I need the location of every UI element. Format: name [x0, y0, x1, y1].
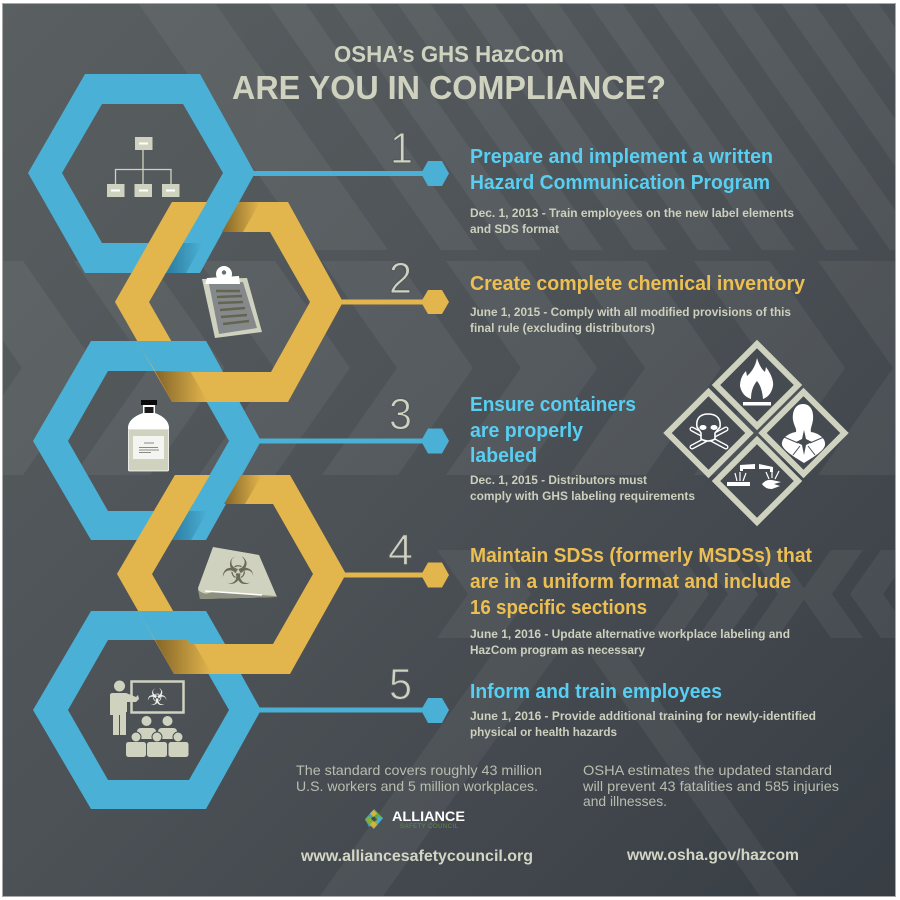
pictogram: corrosion: [716, 440, 798, 522]
step 1 text: [470, 146, 794, 236]
statistic: workers covered: The standard covers roughly 43 million: [296, 762, 542, 778]
icon: biohazard binder: [198, 547, 277, 599]
pictogram: flame: [716, 344, 798, 426]
title: ARE YOU IN COMPLIANCE?: [232, 69, 666, 106]
statistic: fatalities prevented: [582, 762, 839, 809]
step 4 text: HazCom program as necessary: [470, 643, 645, 657]
icon: biohazard binder: ☣: [221, 549, 255, 593]
statistic: fatalities prevented: OSHA estimates the updated standard: [583, 762, 832, 778]
connector: step 3: [255, 428, 449, 454]
hexagon 3 top overlap: [91, 341, 223, 402]
logo: Alliance Safety Council: SAFETY COUNCIL: [400, 824, 459, 830]
statistic: fatalities prevented: and illnesses.: [583, 793, 667, 809]
icon: teacher and students: [110, 680, 188, 757]
connector: step 5: [255, 698, 449, 723]
step 1 text: Hazard Communication Program: [470, 172, 770, 194]
step 5 text: physical or health hazards: [470, 725, 617, 739]
step 5 text: [470, 681, 816, 739]
hazard pictogram diamonds: [668, 344, 844, 522]
step 2 text: [470, 273, 806, 335]
pictogram: skull and crossbones: [668, 392, 750, 474]
step 1 text: and SDS format: [470, 222, 559, 236]
icon: org chart: [107, 137, 180, 197]
number 3: 3: [389, 390, 412, 439]
step 4 text: are in a uniform format and include: [470, 571, 791, 593]
hexagon 5 blue: [33, 611, 261, 809]
step 3 text: Ensure containers: [470, 394, 636, 416]
step 4 text: June 1, 2016 - Update alternative workplace labeling and: [470, 627, 790, 641]
step 2 text: final rule (excluding distributors): [470, 321, 655, 335]
hexagon 2 gold: [115, 202, 343, 402]
hexagon 1 blue: [28, 74, 255, 273]
title: OSHA’s GHS HazCom: [334, 41, 564, 67]
connector: step 2: [338, 290, 449, 314]
step 2 text: June 1, 2015 - Comply with all modified provisions of this: [470, 305, 791, 319]
pictogram: health hazard torso: [762, 392, 844, 474]
connector: step 4: [340, 562, 449, 588]
icon: clipboard: [202, 266, 262, 338]
icon: chemical bottle: [128, 400, 169, 471]
step 3 text: are properly: [470, 420, 584, 442]
step 3 text: comply with GHS labeling requirements: [470, 489, 695, 503]
statistic: fatalities prevented: will prevent 43 fatalities and 585 injuries: [582, 778, 839, 794]
hexagon 4 gold: [117, 475, 346, 674]
logo: Alliance Safety Council: ALLIANCE: [392, 808, 465, 824]
hexagon 2 left arm overlap: [115, 202, 260, 302]
step 5 text: June 1, 2016 - Provide additional training for newly-identified: [470, 709, 816, 723]
statistic: workers covered: U.S. workers and 5 million workplaces.: [296, 778, 538, 794]
step 5 text: Inform and train employees: [470, 681, 722, 703]
number 1: 1: [390, 124, 413, 173]
link: alliance: www.alliancesafetycouncil.org: [300, 848, 533, 865]
link: osha: www.osha.gov/hazcom: [626, 847, 799, 864]
connector: step 1: [250, 161, 449, 186]
statistic: workers covered: [296, 762, 542, 794]
step 1 text: Prepare and implement a written: [470, 146, 773, 168]
hexagon 3 blue: [33, 341, 261, 540]
icon: teacher and students: ☣: [147, 685, 167, 711]
hexagon 4 left arm overlap: [117, 475, 262, 574]
step 3 text: [470, 394, 695, 503]
title: [232, 41, 666, 106]
number 2: 2: [389, 254, 412, 303]
logo: Alliance Safety Council: [365, 808, 465, 830]
step 4 text: Maintain SDSs (formerly MSDSs) that: [470, 545, 812, 567]
step 4 text: 16 specific sections: [470, 597, 647, 619]
step 4 text: [470, 545, 812, 657]
number 5: 5: [389, 660, 412, 709]
step 2 text: Create complete chemical inventory: [470, 273, 806, 295]
step 3 text: labeled: [470, 445, 537, 467]
step 1 text: Dec. 1, 2013 - Train employees on the new label elements: [470, 206, 794, 220]
hexagon 5 top overlap: [91, 611, 225, 674]
step 3 text: Dec. 1, 2015 - Distributors must: [470, 473, 647, 487]
number 4: 4: [388, 526, 413, 575]
